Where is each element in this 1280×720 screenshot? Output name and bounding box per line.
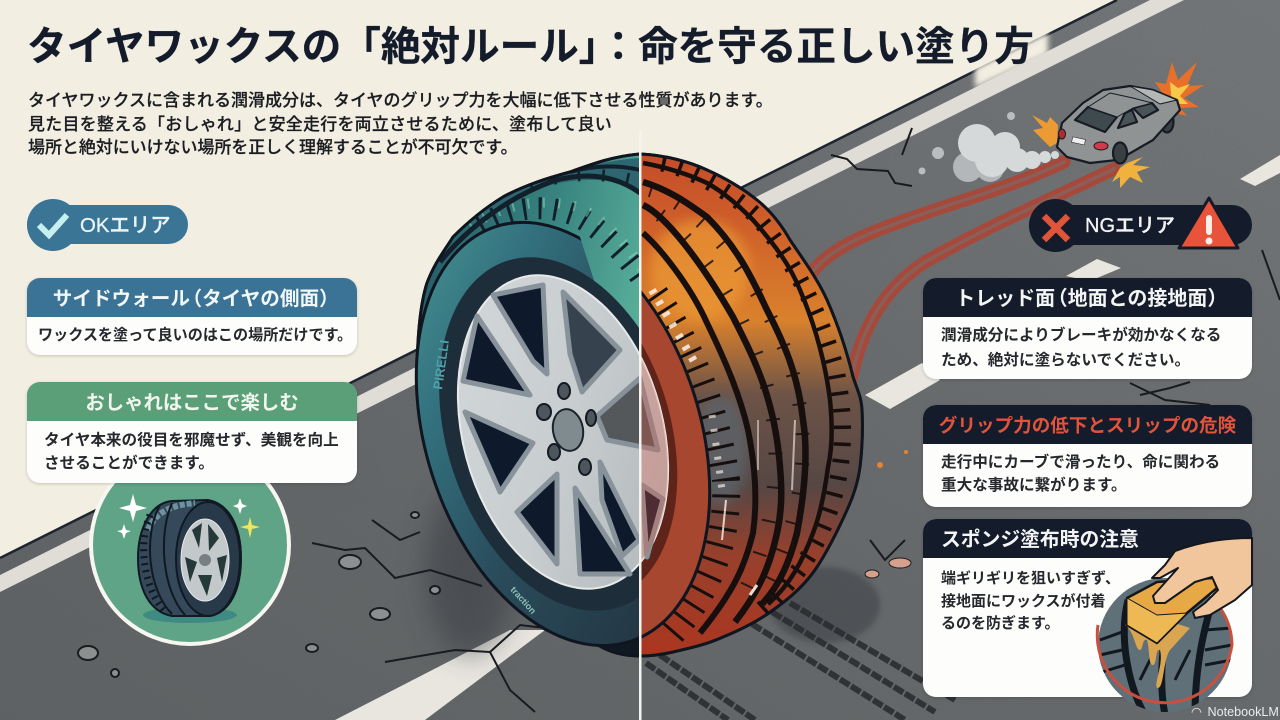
icon: check mark xyxy=(37,213,70,240)
card body: grip danger: 走行中にカーブで滑ったり、命に関わる xyxy=(941,454,1220,471)
sidewall lettering: traction xyxy=(509,585,538,616)
card heading: sidewall: サイドウォール（タイヤの側面） xyxy=(53,288,339,310)
card body: tread: ため、絶対に塗らないでください。 xyxy=(941,352,1190,368)
card: tread xyxy=(923,278,1252,379)
card heading: sponge caution: スポンジ塗布時の注意 xyxy=(941,529,1139,551)
card: sidewall xyxy=(27,278,357,355)
teal left half: tread xyxy=(422,156,639,328)
NotebookLM watermark: ◠ NotebookLM xyxy=(1191,705,1279,719)
card heading: enjoy style: おしゃれはここで楽しむ xyxy=(85,392,299,414)
alloy wheel rim xyxy=(456,274,670,590)
card: sponge caution xyxy=(923,519,1252,697)
sidewall xyxy=(414,220,712,647)
orange right half: tread xyxy=(642,156,861,654)
smoke cloud xyxy=(918,112,1059,182)
title: タイヤワックスの「絶対ルール」：命を守る正しい塗り方 xyxy=(27,25,1034,69)
NG area badge xyxy=(1029,196,1252,252)
OK area badge xyxy=(27,199,188,251)
card body: enjoy style xyxy=(44,432,339,472)
sparkles xyxy=(117,494,260,539)
card body: enjoy style: させることができます。 xyxy=(44,455,214,472)
card body: sponge caution xyxy=(941,570,1120,632)
card: grip danger xyxy=(923,405,1252,507)
sponge and hand inset illustration xyxy=(1096,537,1253,712)
tire silhouette xyxy=(417,154,862,656)
card heading: sponge caution xyxy=(923,519,1252,558)
burst top right xyxy=(1155,62,1204,116)
wax drips xyxy=(1125,615,1190,688)
sponge xyxy=(1127,578,1217,643)
card body: grip danger: 重大な事故に繋がります。 xyxy=(941,476,1127,494)
card body: sponge caution: 端ギリギリを狙いすぎず、 xyxy=(941,570,1120,587)
card body: enjoy style: タイヤ本来の役目を邪魔せず、美観を向上 xyxy=(44,432,339,449)
card: enjoy style here xyxy=(27,382,357,483)
mini tire circle illustration xyxy=(89,483,291,646)
tire outline xyxy=(417,154,862,656)
card body: sidewall: ワックスを塗って良いのはこの場所だけです。 xyxy=(38,327,352,344)
center divider line xyxy=(639,130,642,720)
intro text xyxy=(28,91,773,157)
intro text: 見た目を整える「おしゃれ」と安全走行を両立させるために、塗布して良い xyxy=(28,114,612,134)
burst left xyxy=(1032,115,1058,147)
burst bottom xyxy=(1112,157,1150,188)
intro text: タイヤワックスに含まれる潤滑成分は、タイヤのグリップ力を大幅に低下させる性質があります。 xyxy=(28,91,773,110)
card heading: grip danger xyxy=(923,405,1252,444)
card heading: grip danger: グリップ力の低下とスリップの危険 xyxy=(939,415,1236,436)
sidewall lettering xyxy=(430,339,538,616)
card body: sponge caution: るのを防ぎます。 xyxy=(941,615,1060,632)
sidewall lettering: PIRELLI xyxy=(430,339,452,390)
card body: tread: 潤滑成分によりブレーキが効かなくなる xyxy=(941,327,1221,344)
card heading: tread: トレッド面（地面との接地面） xyxy=(955,288,1227,310)
card heading: enjoy style xyxy=(27,382,357,421)
icon: cross and warning triangle xyxy=(1042,196,1240,250)
card body: sponge caution: 接地面にワックスが付着 xyxy=(941,592,1106,610)
OK area badge: OKエリア xyxy=(80,215,171,237)
card body: tread xyxy=(941,326,1221,368)
intro text: 場所と絶対にいけない場所を正しく理解することが不可欠です。 xyxy=(28,138,518,157)
NG area badge: NGエリア xyxy=(1085,215,1175,237)
hand xyxy=(1152,538,1252,618)
card body: grip danger xyxy=(941,454,1220,494)
car body xyxy=(1057,86,1180,164)
card heading: tread xyxy=(923,278,1252,317)
card heading: sidewall xyxy=(27,278,357,317)
main tire split illustration xyxy=(414,130,864,720)
